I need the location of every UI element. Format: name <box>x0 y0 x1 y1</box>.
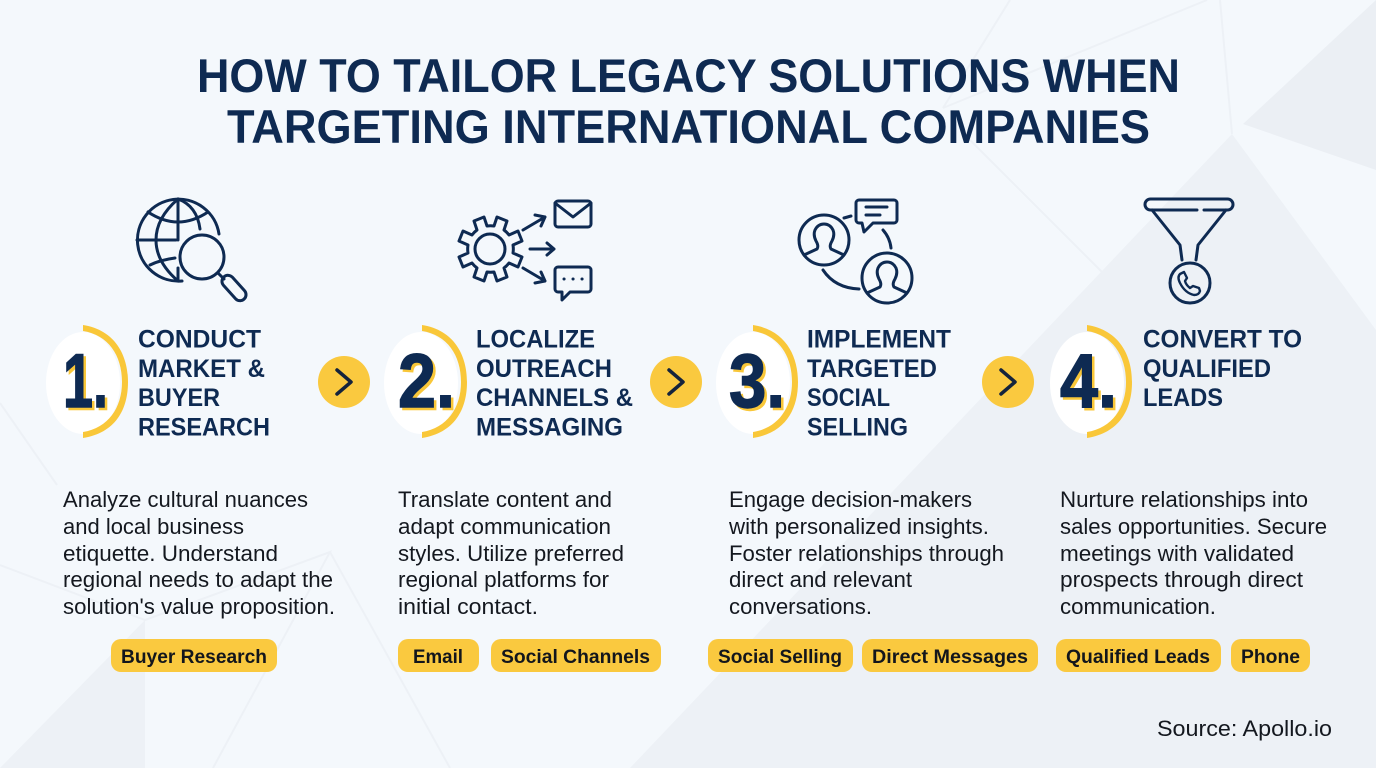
arrow 3 to 4 <box>982 356 1034 408</box>
step number 4: 4. <box>1062 342 1120 426</box>
tag: Email: Email <box>413 647 463 668</box>
heading 2: LOCALIZE <box>476 326 595 354</box>
heading 3: SOCIAL <box>807 384 890 412</box>
description 2: initial contact. <box>398 594 538 619</box>
description 1: regional needs to adapt the <box>63 567 333 592</box>
step number 2 <box>384 325 467 438</box>
heading 4: QUALIFIED <box>1143 355 1271 383</box>
heading 2 <box>476 326 633 442</box>
step number 3 <box>716 325 798 438</box>
description 4: sales opportunities. Secure <box>1060 514 1327 539</box>
description 2: Translate content and <box>398 487 612 512</box>
heading 3 <box>807 326 951 442</box>
step number 1 <box>46 325 128 438</box>
tag: Social Channels <box>491 639 661 672</box>
arrow 2 to 3 <box>650 356 702 408</box>
icon: funnel with phone <box>1145 199 1233 303</box>
description 3: direct and relevant <box>729 567 912 592</box>
tag: Qualified Leads: Qualified Leads <box>1066 647 1210 668</box>
tag: Phone <box>1231 639 1310 672</box>
description 4 <box>1060 487 1327 619</box>
icon: two people with chat bubble <box>799 200 912 303</box>
title: HOW TO TAILOR LEGACY SOLUTIONS WHEN <box>197 50 1180 103</box>
description 3 <box>728 487 1004 619</box>
heading 1: MARKET & <box>138 355 265 383</box>
heading 2: CHANNELS & <box>476 384 633 412</box>
icon: globe with magnifier <box>137 199 248 303</box>
panel: step 4 convert to qualified leads <box>1050 199 1327 672</box>
step number 4 <box>1050 325 1132 438</box>
heading 3: TARGETED <box>807 355 937 383</box>
source note: Source: Apollo.io <box>1157 716 1332 741</box>
step number 2: 2. <box>398 339 455 424</box>
tag: Phone: Phone <box>1241 647 1300 668</box>
description 3: Engage decision-makers <box>729 487 972 512</box>
step number 3: 3. <box>732 342 788 426</box>
description 2: adapt communication <box>398 514 611 539</box>
title: TARGETING INTERNATIONAL COMPANIES <box>227 101 1150 154</box>
tag: Social Channels: Social Channels <box>501 647 650 668</box>
tag: Social Selling <box>708 639 853 672</box>
heading 2: OUTREACH <box>476 355 612 383</box>
heading 1: BUYER <box>138 384 220 412</box>
panel: step 2 localize outreach channels and messaging <box>384 201 661 672</box>
heading 1 <box>138 326 270 442</box>
tag: Email <box>398 639 479 672</box>
description 3: Foster relationships through <box>729 541 1004 566</box>
tag: Direct Messages: Direct Messages <box>872 647 1028 668</box>
panel: step 1 conduct market and buyer research <box>46 199 335 672</box>
description 2 <box>398 487 624 619</box>
description 1: and local business <box>63 514 244 539</box>
description 4: Nurture relationships into <box>1060 487 1308 512</box>
tag: Qualified Leads <box>1056 639 1221 672</box>
step number 1: 1. <box>66 342 110 426</box>
description 4: meetings with validated <box>1060 541 1294 566</box>
heading 3: SELLING <box>807 414 908 442</box>
description 3: with personalized insights. <box>728 514 989 539</box>
step number 1: 1. <box>63 339 108 424</box>
tag: Buyer Research <box>111 639 277 672</box>
heading 4: LEADS <box>1143 384 1223 412</box>
heading 1: CONDUCT <box>138 326 261 354</box>
heading 4 <box>1143 326 1302 412</box>
description 1: etiquette. Understand <box>63 541 278 566</box>
step number 3: 3. <box>729 339 785 424</box>
tag: Direct Messages <box>862 639 1038 672</box>
tag: Social Selling: Social Selling <box>718 647 842 668</box>
heading 1: RESEARCH <box>138 414 270 442</box>
description 1 <box>63 487 335 619</box>
description 4: prospects through direct <box>1060 567 1303 592</box>
title <box>197 50 1180 154</box>
panel: step 3 implement targeted social selling <box>708 200 1038 672</box>
arrow 1 to 2 <box>318 356 370 408</box>
description 4: communication. <box>1060 594 1216 619</box>
description 1: Analyze cultural nuances <box>63 487 308 512</box>
heading 2: MESSAGING <box>476 414 623 442</box>
description 1: solution's value proposition. <box>63 594 335 619</box>
step number 2: 2. <box>400 342 458 426</box>
description 3: conversations. <box>729 594 872 619</box>
description 2: regional platforms for <box>398 567 609 592</box>
heading 3: IMPLEMENT <box>807 326 951 354</box>
step number 4: 4. <box>1060 339 1117 424</box>
icon: gear with arrows, envelope and chat <box>459 201 591 300</box>
heading 4: CONVERT TO <box>1143 326 1302 354</box>
tag: Buyer Research: Buyer Research <box>121 647 267 668</box>
description 2: styles. Utilize preferred <box>398 541 624 566</box>
